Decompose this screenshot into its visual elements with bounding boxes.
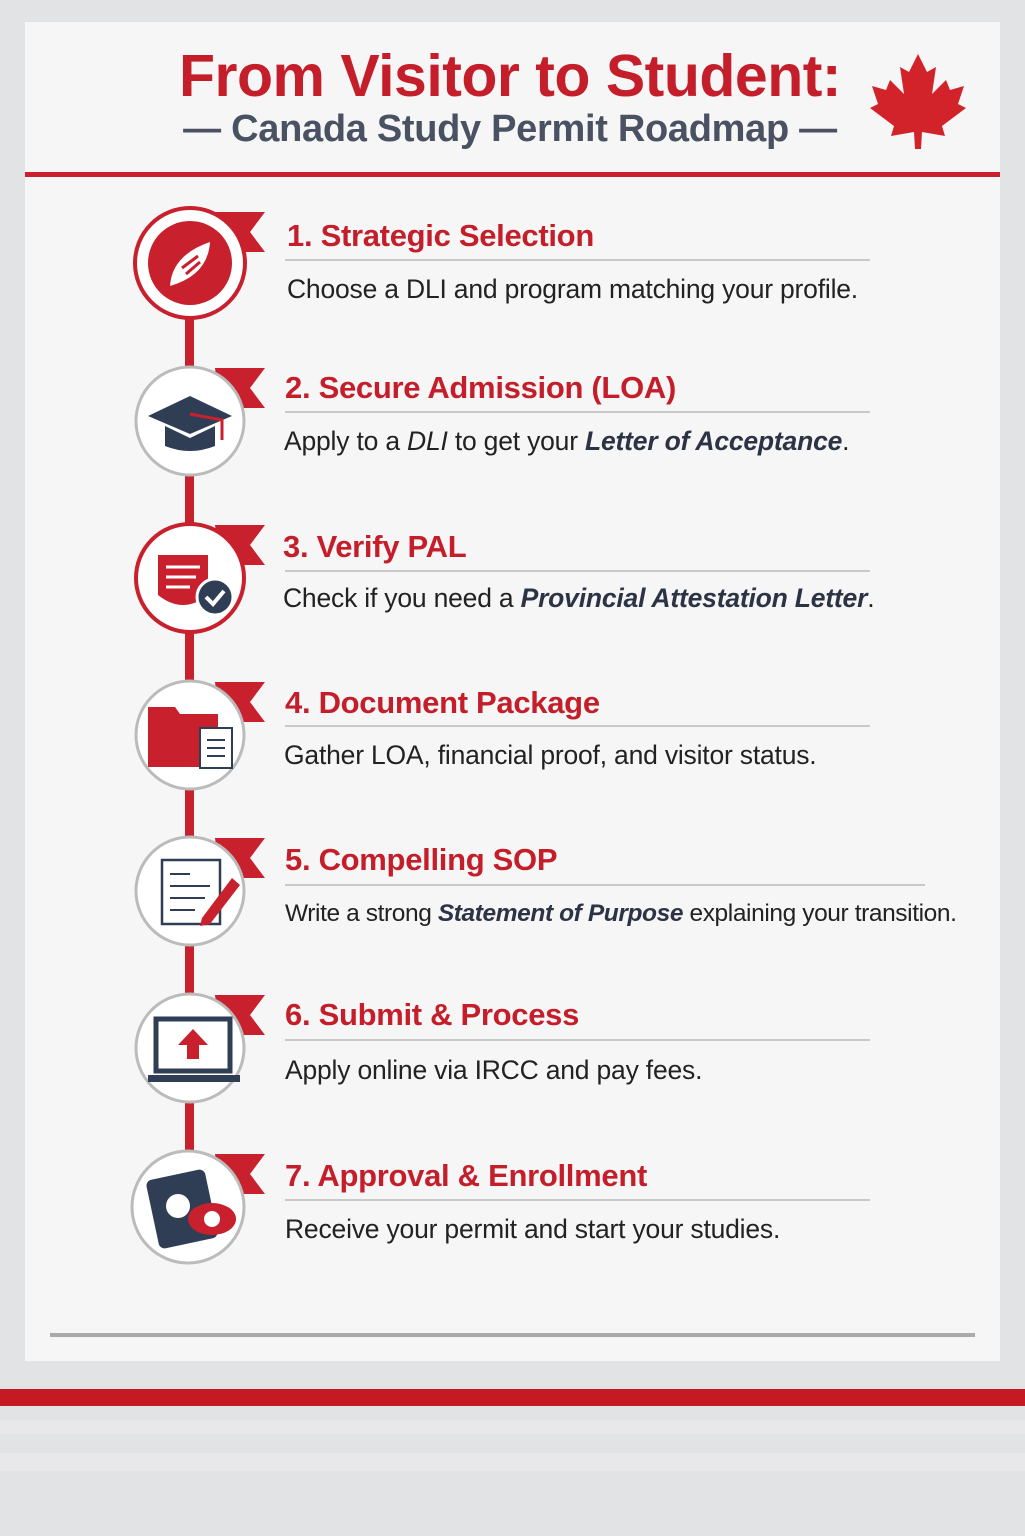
timeline connector	[185, 300, 194, 1190]
text 3: Check if you need a Provincial Attestation Letter.	[283, 583, 874, 613]
step 3	[134, 522, 874, 634]
text 7: Receive your permit and start your studies.	[285, 1214, 780, 1244]
icon: maple leaf	[870, 54, 966, 149]
heading 2: 2. Secure Admission (LOA)	[285, 370, 676, 405]
step 6	[134, 992, 870, 1104]
text 2: Apply to a DLI to get your Letter of Acceptance.	[284, 426, 849, 456]
text 5: Write a strong Statement of Purpose explaining your transition.	[285, 900, 957, 927]
text 6: Apply online via IRCC and pay fees.	[285, 1055, 702, 1085]
step 4	[134, 680, 870, 790]
step 2	[134, 366, 870, 476]
title: From Visitor to Student:	[179, 43, 841, 109]
heading 5: 5. Compelling SOP	[285, 842, 557, 877]
heading 4: 4. Document Package	[285, 685, 600, 720]
step 1	[133, 206, 870, 320]
footer divider	[50, 1333, 975, 1337]
subtitle: — Canada Study Permit Roadmap —	[183, 108, 837, 150]
heading 3: 3. Verify PAL	[283, 529, 466, 564]
text 4: Gather LOA, financial proof, and visitor status.	[284, 740, 816, 770]
text 1: Choose a DLI and program matching your profile.	[287, 274, 858, 304]
heading 6: 6. Submit & Process	[285, 997, 579, 1032]
heading 1: 1. Strategic Selection	[287, 218, 594, 253]
red band	[0, 1389, 1025, 1406]
header divider	[25, 172, 1000, 177]
step 5	[134, 836, 957, 946]
step 7	[130, 1150, 870, 1264]
heading 7: 7. Approval & Enrollment	[285, 1158, 647, 1193]
